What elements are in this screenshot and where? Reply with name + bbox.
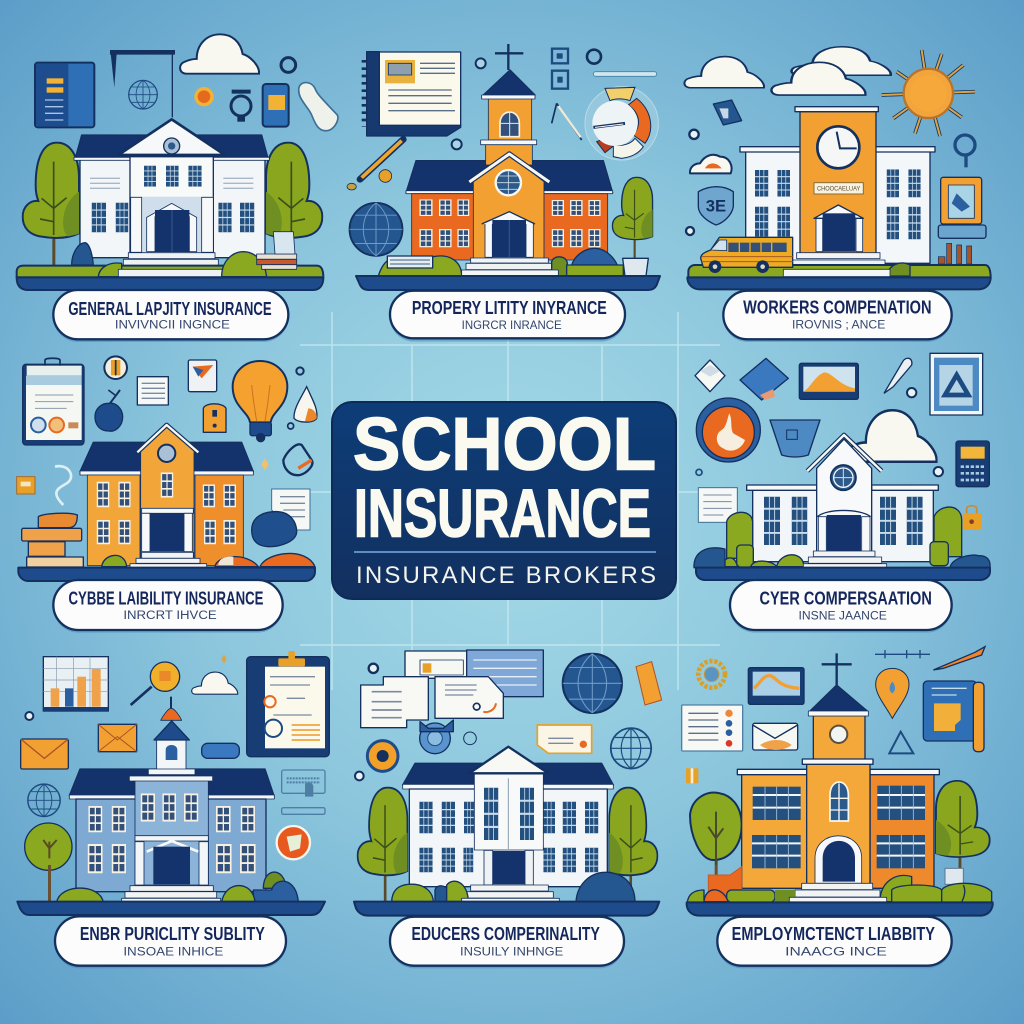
label: general liability [53,290,288,342]
icons: employment [682,647,985,783]
school building [74,119,269,269]
label: public liability: ENBR PURICLITY SUBLITY [80,923,265,944]
panel: cyber compensation [694,353,990,633]
tree right [266,143,322,267]
tree left [690,793,742,875]
title: insurance: INSURANCE [354,476,651,552]
label: cyber compensation: CYER COMPERSAATION [759,587,932,608]
panel: employment liability [682,647,993,968]
label: cyber liability: CYBBE LAIBILITY INSURANCE [68,587,263,608]
ground platform [18,553,315,581]
school building [406,70,613,270]
school building [740,107,935,269]
icon: school bus [701,237,793,273]
icons: general liability [35,34,338,131]
panel: educators liability [354,650,662,968]
label: workers compensation: WORKERS COMPENATION [743,296,931,317]
tree right [936,781,990,880]
label: property liability: INGRCR INRANCE [462,318,562,332]
icons: educators [355,650,662,780]
icons: cyber liability [17,356,317,567]
label: educators liability: INSUILY INHNGE [460,945,563,959]
school building [80,425,253,566]
label: educators liability [390,917,624,968]
icons: workers compensation [684,47,986,264]
label: employment liability: INAACG INCE [785,945,887,959]
school building [69,697,274,898]
ground platform [687,867,993,916]
title: school: SCHOOL [353,402,656,486]
label: workers compensation: IROVNIS ; ANCE [792,317,885,331]
label: property liability [390,291,625,342]
panel: public liability [17,651,329,968]
ground platform [17,872,325,915]
label: cyber compensation [730,580,952,633]
school building: CHOOCAELUAY [817,186,861,193]
label: educators liability: EDUCERS COMPERINALITY [411,923,600,944]
tree left [23,143,79,267]
title box [332,402,676,599]
label: property liability: PROPERY LITITY INYRANCE [412,297,607,318]
ground platform [687,263,991,289]
label: cyber liability: INRCRT IHVCE [123,608,217,622]
ground platform [17,232,323,290]
icons: public liability [21,651,329,859]
label: cyber compensation: INSNE JAANCE [798,609,887,623]
icons: workers compensation: 3E [706,197,726,216]
school building [747,435,938,563]
label: workers compensation [723,291,952,342]
label: general liability: GENERAL LAPJITY INSURANCE [68,298,272,319]
label: public liability: INSOAE INHICE [123,945,223,959]
label: general liability: INVIVNCII INGNCE [115,317,230,331]
ground platform [356,248,660,290]
panel: cyber liability insurance [17,356,317,633]
label: employment liability [717,917,952,968]
panel: property liability insurance [347,44,660,342]
panel: general liability insurance [17,34,338,342]
label: public liability [55,916,286,968]
tree [25,823,72,902]
ground platform [694,507,990,580]
tree [612,177,653,258]
icons: cyber compensation [695,353,989,530]
divider rule [354,551,656,553]
label: cyber liability [53,580,283,633]
icons: property [347,44,658,256]
label: employment liability: EMPLOYMCTENCT LIABBITY [732,923,935,944]
tree right [609,788,657,902]
panel: workers compensation [684,47,991,342]
ground platform [354,872,659,916]
subtitle: INSURANCE BROKERS [356,562,656,589]
tree left [358,788,407,902]
school building [737,653,939,897]
school building [403,747,613,898]
